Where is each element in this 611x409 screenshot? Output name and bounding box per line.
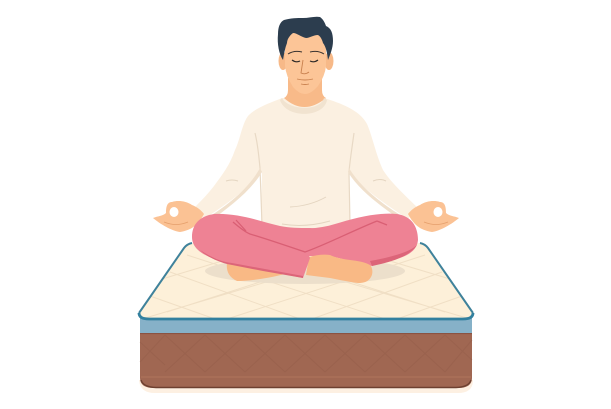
trouser creases	[233, 220, 387, 252]
neck	[284, 78, 326, 107]
nose	[301, 60, 309, 74]
hair	[278, 17, 333, 60]
right trouser shading	[370, 245, 417, 266]
torso and arms: cream sweater	[194, 98, 418, 232]
illustration: man meditating on a mattress	[138, 16, 474, 393]
left trouser leg	[192, 214, 330, 278]
mattress quilted top	[139, 243, 473, 319]
mattress	[139, 243, 473, 393]
mattress base shadow	[139, 380, 473, 393]
left foot	[227, 262, 285, 281]
mouth	[297, 79, 313, 84]
eyebrows	[288, 51, 324, 54]
right hand	[408, 201, 459, 232]
left hand	[153, 201, 204, 232]
sweater collar	[280, 98, 327, 114]
mattress brown side	[140, 330, 472, 388]
right trouser leg	[300, 214, 418, 266]
closed eyes	[292, 60, 318, 62]
shadow under legs	[205, 258, 405, 284]
head	[278, 17, 334, 94]
face	[285, 30, 326, 94]
ears	[278, 52, 288, 70]
mattress blue band	[140, 315, 472, 333]
right foot	[306, 255, 372, 283]
